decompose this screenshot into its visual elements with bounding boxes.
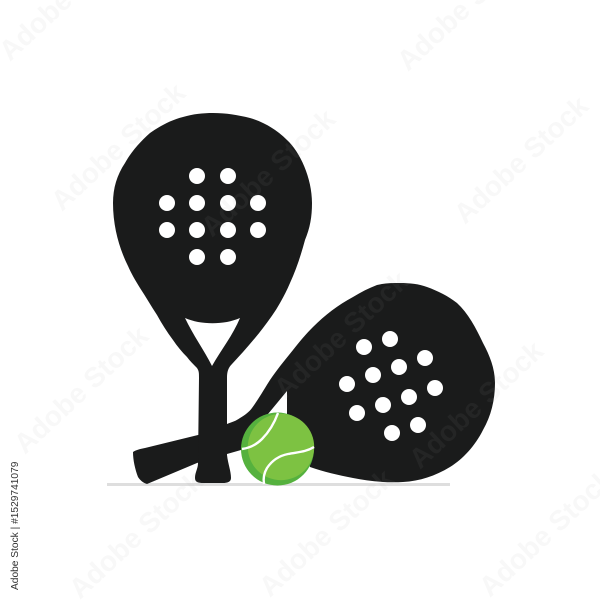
watermark text: Adobe Stock	[268, 265, 415, 404]
tennis ball	[241, 412, 314, 486]
racket: leaning horizontal	[133, 283, 495, 484]
watermark text: Adobe Stock	[403, 335, 550, 474]
stock id caption: Adobe Stock | #1529741079	[10, 461, 21, 590]
watermark text: Adobe Stock	[8, 320, 155, 459]
watermark text: Adobe Stock	[45, 77, 192, 216]
racket holes	[339, 331, 443, 441]
watermark text: Adobe Stock	[195, 103, 342, 242]
racket head and handle silhouette	[133, 283, 495, 484]
racket head, throat and handle silhouette	[113, 113, 312, 483]
racket holes	[159, 168, 266, 265]
racket: upright	[113, 113, 312, 483]
ground shadow line	[107, 483, 450, 486]
watermark text: Adobe Stock	[448, 90, 595, 229]
watermark text: Adobe Stock	[253, 463, 400, 600]
